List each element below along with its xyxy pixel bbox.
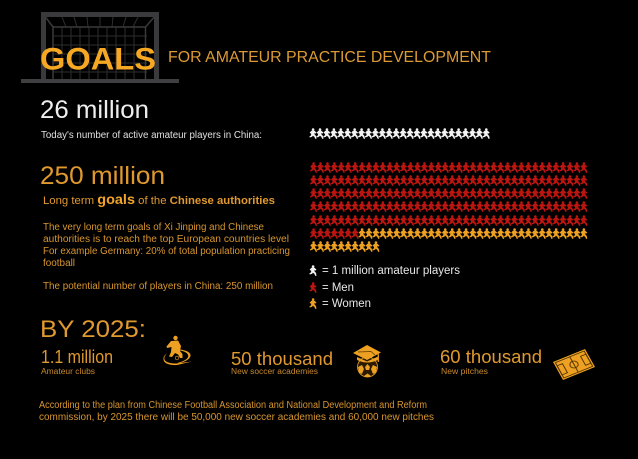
pictogram: 250 million players [310,162,587,252]
stat: amateur clubs: Amateur clubs [41,367,95,376]
icon: football pitch [553,349,595,380]
pictogram: 26 million players [310,128,490,139]
text: current players: Today's number of active amateur players in China: [41,130,262,141]
heading: long term goals: Long term goals of the Chinese authorities [43,191,275,207]
stat: amateur clubs: 1.1 million [41,347,113,367]
icon: football player [163,336,192,365]
text: long term explanation: authorities is to reach the top European countries level [43,234,289,245]
stat: new pitches: 60 thousand [440,347,542,367]
stat: amateur clubs [41,347,113,376]
stat: 250 million: 250 million [40,162,165,190]
title: GOALS [40,40,156,76]
text: long term explanation: football [43,258,75,269]
title: FOR AMATEUR PRACTICE DEVELOPMENT [168,49,491,66]
text: long term explanation: For example Germany: 20% of total population practicing [43,246,290,257]
stat: soccer academies: New soccer academies [231,367,318,376]
text: long term explanation [43,222,290,269]
stat: new pitches: New pitches [441,367,488,376]
legend: = 1 million amateur players [322,265,460,277]
stat: 26 million: 26 million [40,96,149,124]
legend: = Women [322,298,371,310]
title [40,40,491,76]
icon: graduation cap and ball [353,345,381,377]
text: potential players: The potential number of players in China: 250 million [43,281,273,292]
text: plan summary: commission, by 2025 there will be 50,000 new soccer academies and 60,000 new pitches [39,412,434,423]
legend: = Men [322,282,354,294]
icon: goal frame with net [21,14,179,83]
stat: soccer academies: 50 thousand [231,349,333,369]
text: plan summary [39,400,434,423]
heading: by 2025: BY 2025: [40,316,146,343]
legend [310,265,460,310]
stat: new pitches [440,347,542,376]
text: plan summary: According to the plan from Chinese Football Association and National Development and Reform [39,400,427,411]
text: long term explanation: The very long term goals of Xi Jinping and Chinese [43,222,264,233]
